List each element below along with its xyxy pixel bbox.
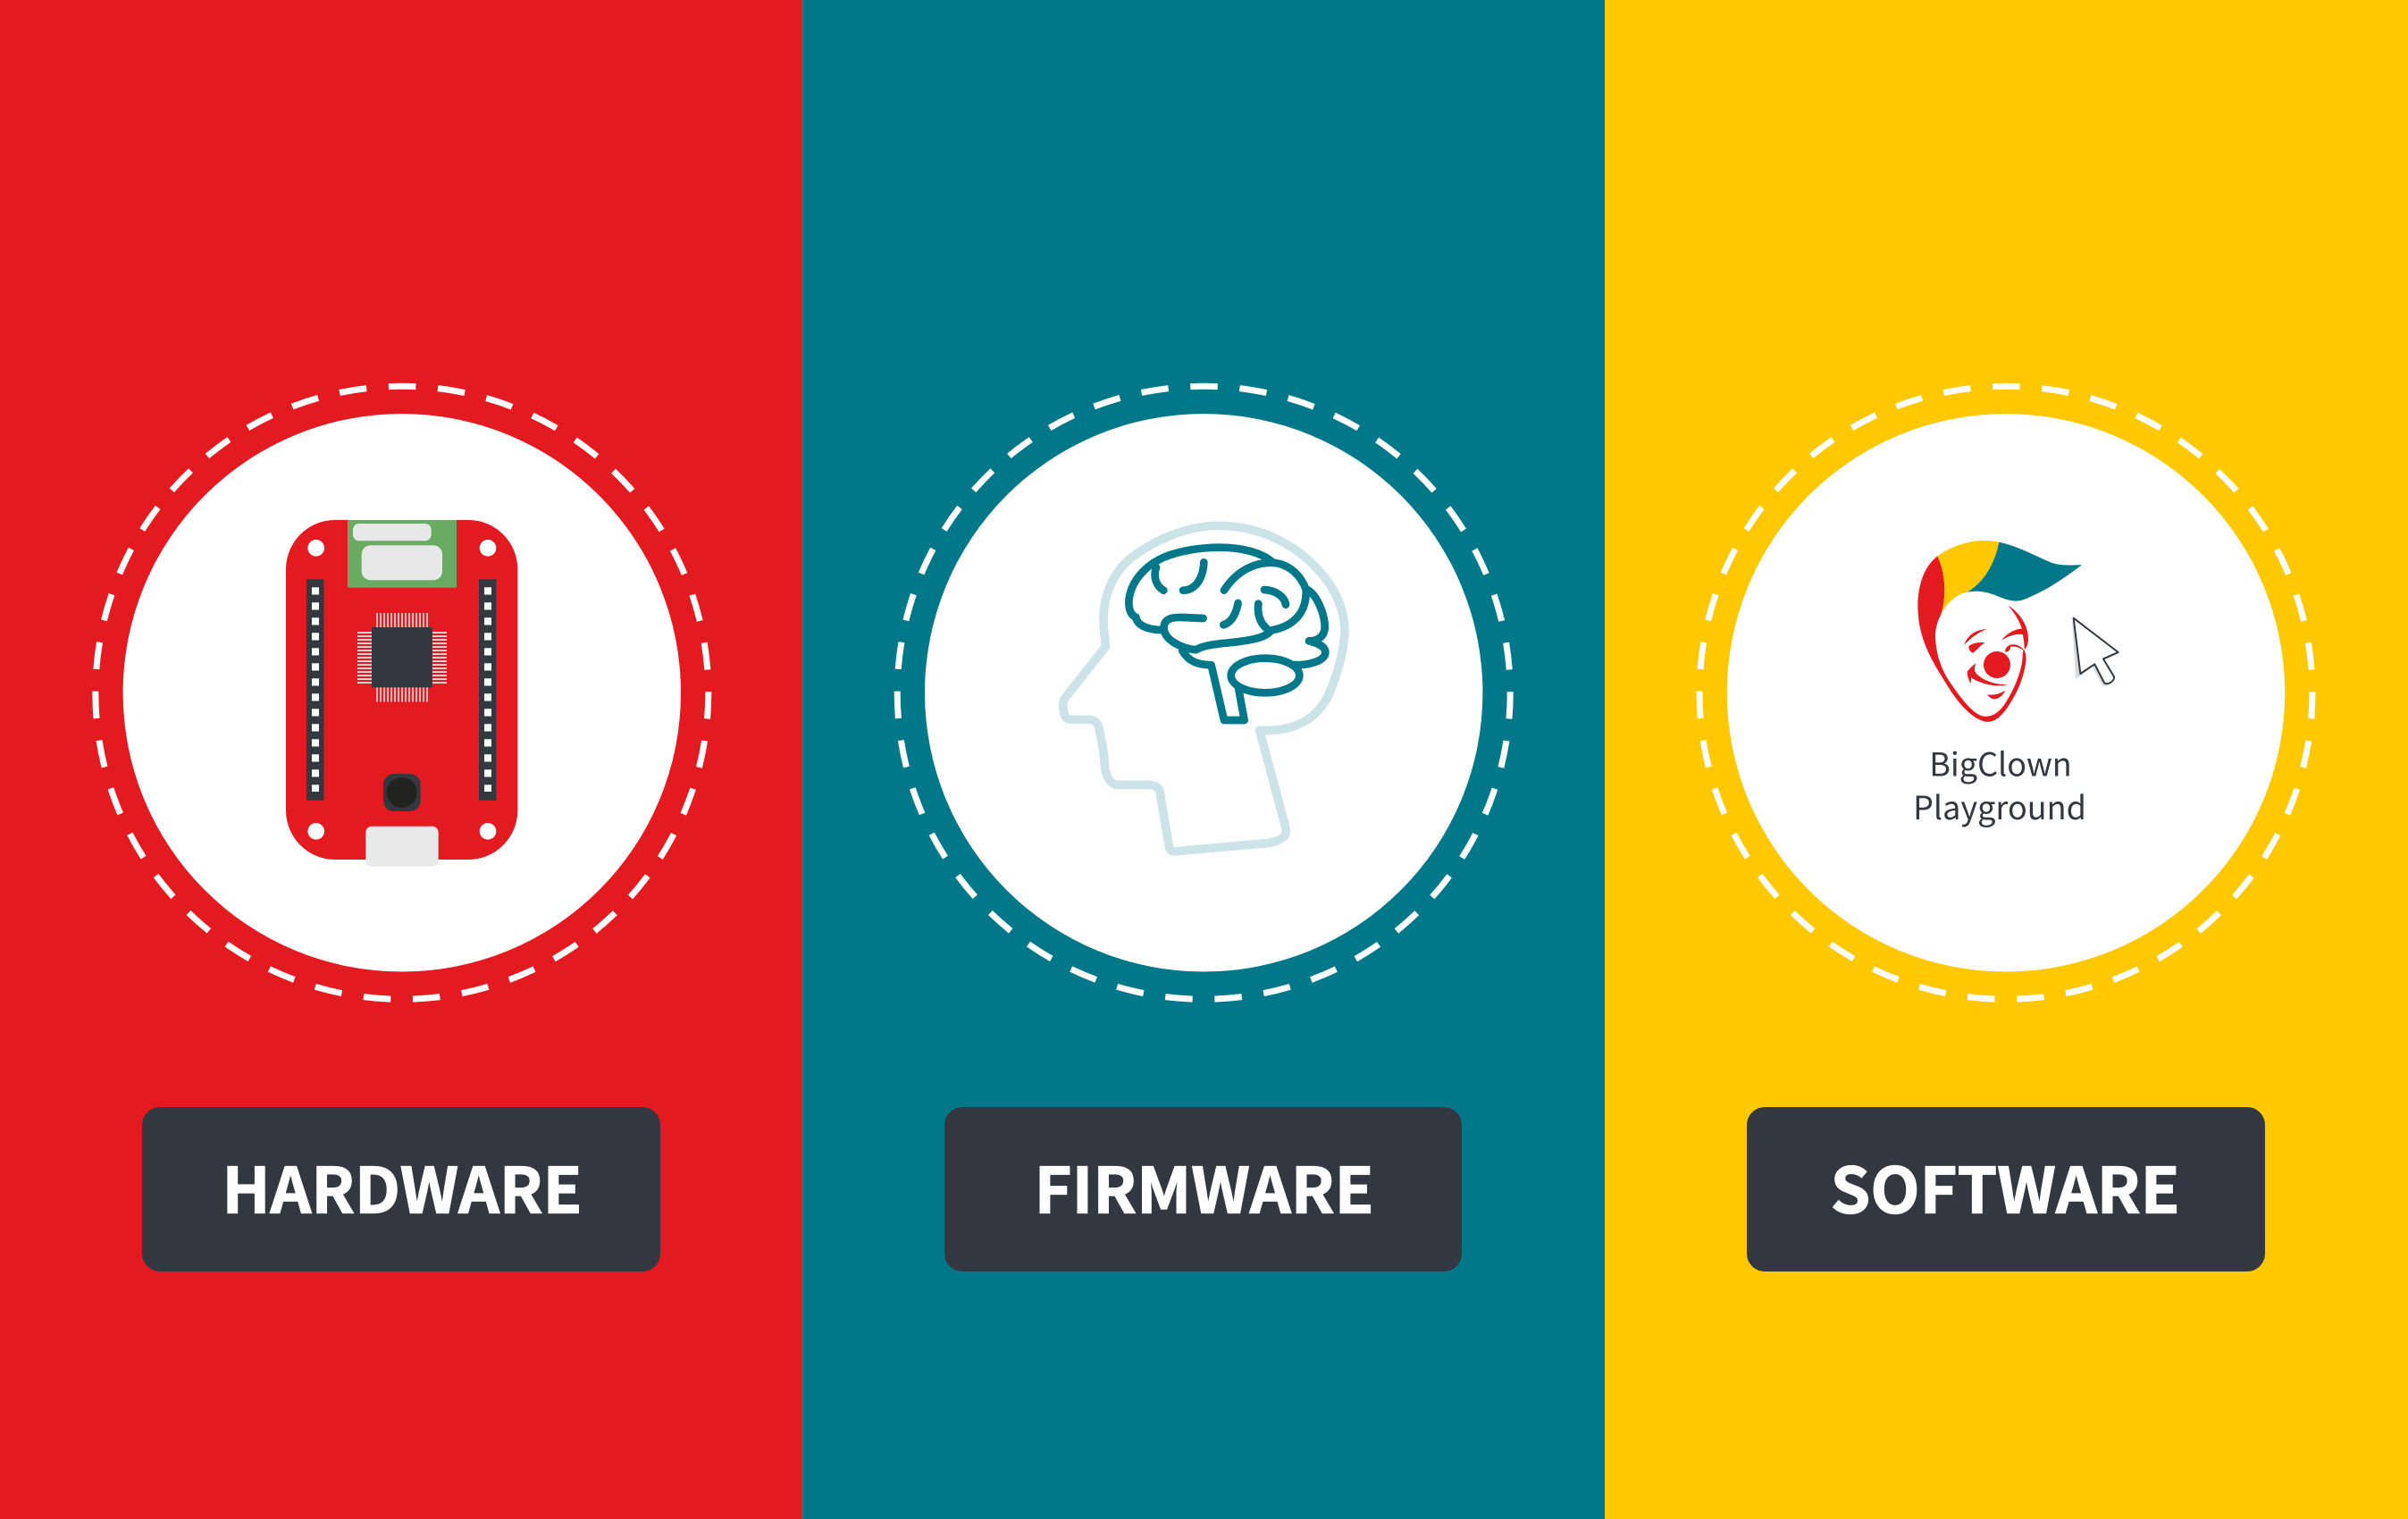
dashed ring: software (1699, 386, 2312, 999)
icon: clown logo (1917, 541, 2082, 722)
dashed ring: hardware (96, 386, 709, 999)
icon: circuit board (286, 520, 517, 867)
button: software (1747, 1107, 2265, 1271)
panel: firmware (802, 0, 1605, 1519)
panel: software (1605, 0, 2408, 1519)
white circle: firmware (925, 414, 1482, 972)
dashed ring: firmware (897, 386, 1510, 999)
icon: head with brain (1063, 525, 1345, 852)
button: software: SOFTWARE (1831, 1141, 2180, 1232)
text: BigClown Playground (1913, 740, 2086, 829)
button: firmware (944, 1107, 1462, 1271)
button: firmware: FIRMWARE (1035, 1141, 1374, 1232)
white circle: software (1727, 414, 2285, 972)
button: hardware: HARDWARE (222, 1141, 583, 1232)
icon: mouse cursor (2072, 618, 2119, 686)
text: BigClown Playground: Playground (1913, 783, 2086, 829)
button: hardware (142, 1107, 660, 1271)
white circle: hardware (123, 414, 681, 972)
panel: hardware (0, 0, 802, 1519)
text: BigClown Playground: BigClown (1929, 740, 2072, 786)
